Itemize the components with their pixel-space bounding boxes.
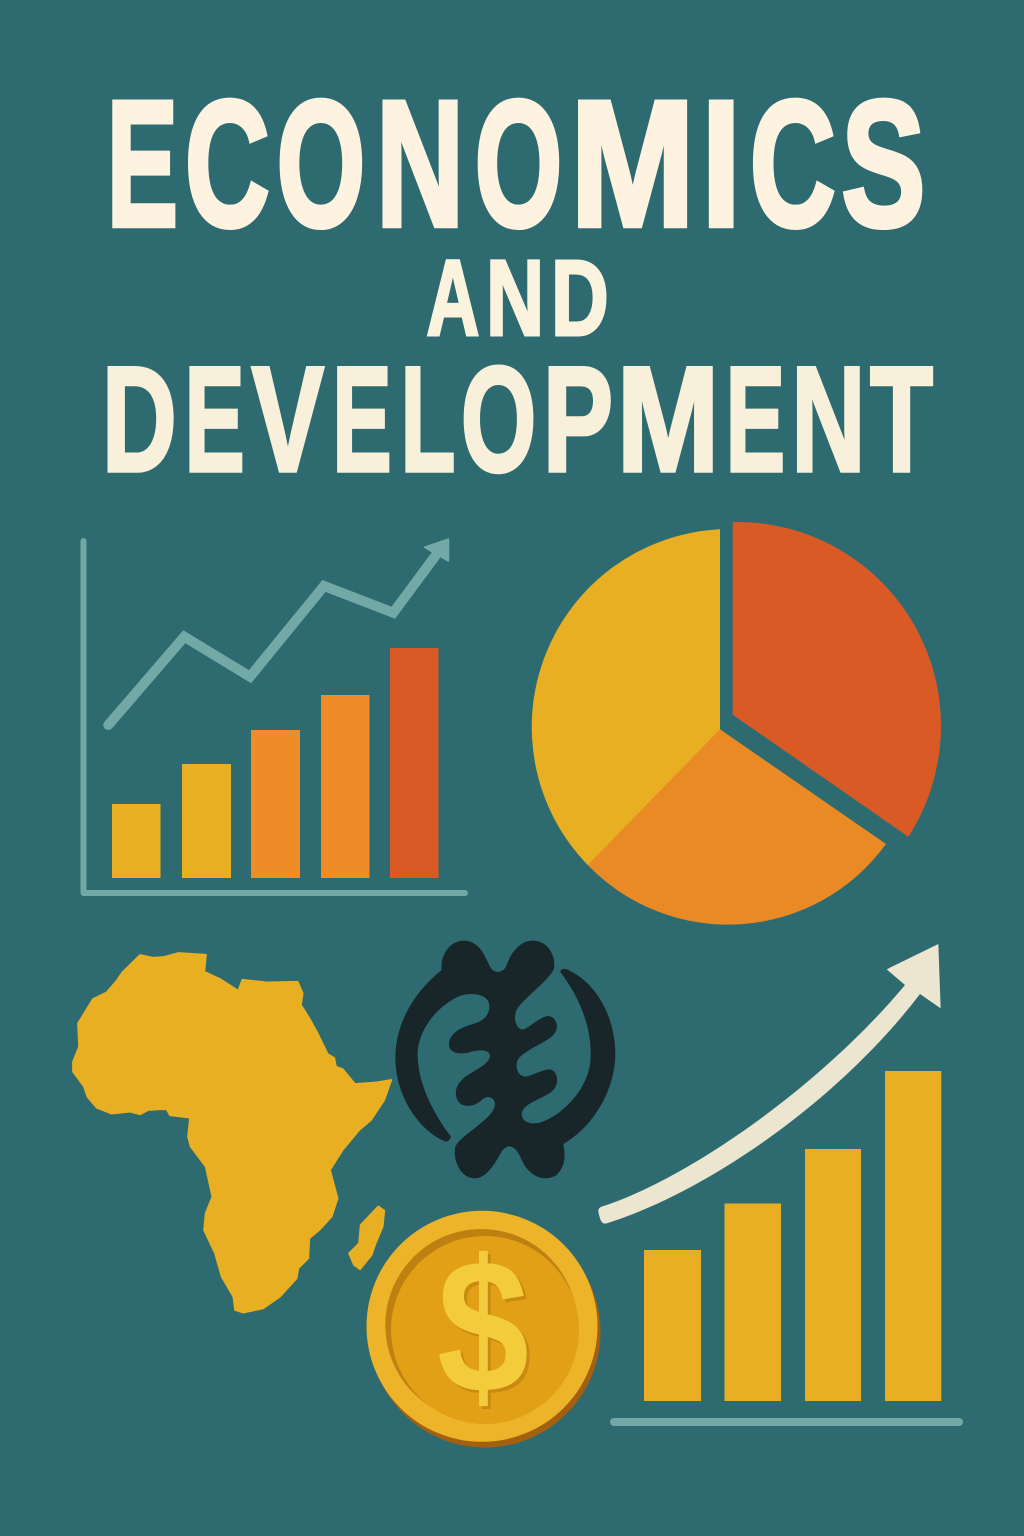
title line: Economics: O [475,64,562,265]
icon: gold dollar coin [366,1211,600,1448]
title line: Development: E [726,335,785,503]
title line: Economics: C [750,64,836,265]
title line: Development: T [870,335,933,503]
icon: map of Africa [73,953,391,1313]
title line: Development: M [616,335,720,503]
coin face [391,1236,579,1424]
title line: Economics: S [841,64,926,265]
left chart: bars with trend line [84,539,465,893]
title line: Development: N [791,335,866,503]
trend line arrow [108,539,448,725]
pie chart [532,522,941,925]
title line: and: A [426,237,479,358]
title line: Development: P [543,335,613,503]
bar chart: four ascending bars [644,1071,941,1401]
title line: Development: E [332,335,392,503]
pie slice: yellow [532,529,722,870]
title line: Economics: O [276,64,365,265]
title line: Economics: M [570,64,695,265]
coin edge shadow [370,1216,600,1448]
pie slice: orange [588,729,886,925]
title [102,64,933,503]
coin rim [366,1211,598,1442]
title line: Economics: I [701,64,741,265]
chart baseline [614,1418,959,1426]
chart axes [84,541,465,893]
title line: Development: O [461,335,536,503]
title line: Development: D [102,335,177,503]
icon: Madagascar [349,1206,384,1269]
right chart: growth bars with arrow [598,944,959,1422]
title line: Economics: C [185,64,270,265]
title line: Development: E [184,335,245,503]
icon: gye nyame symbol [395,941,615,1178]
coin inner recess [385,1229,577,1421]
title line: and: D [551,237,609,358]
dollar sign shadow: $ [440,1223,532,1436]
title line: and: N [486,237,544,358]
title line: Economics: N [376,64,464,265]
title line: Development: V [252,335,324,503]
dollar sign: $ [437,1220,529,1433]
title line: Development: L [400,335,456,503]
bar chart: five ascending bars [112,648,438,878]
title line: Economics: E [107,64,178,265]
pie slice: red [733,522,941,837]
growth arrow [598,944,941,1224]
